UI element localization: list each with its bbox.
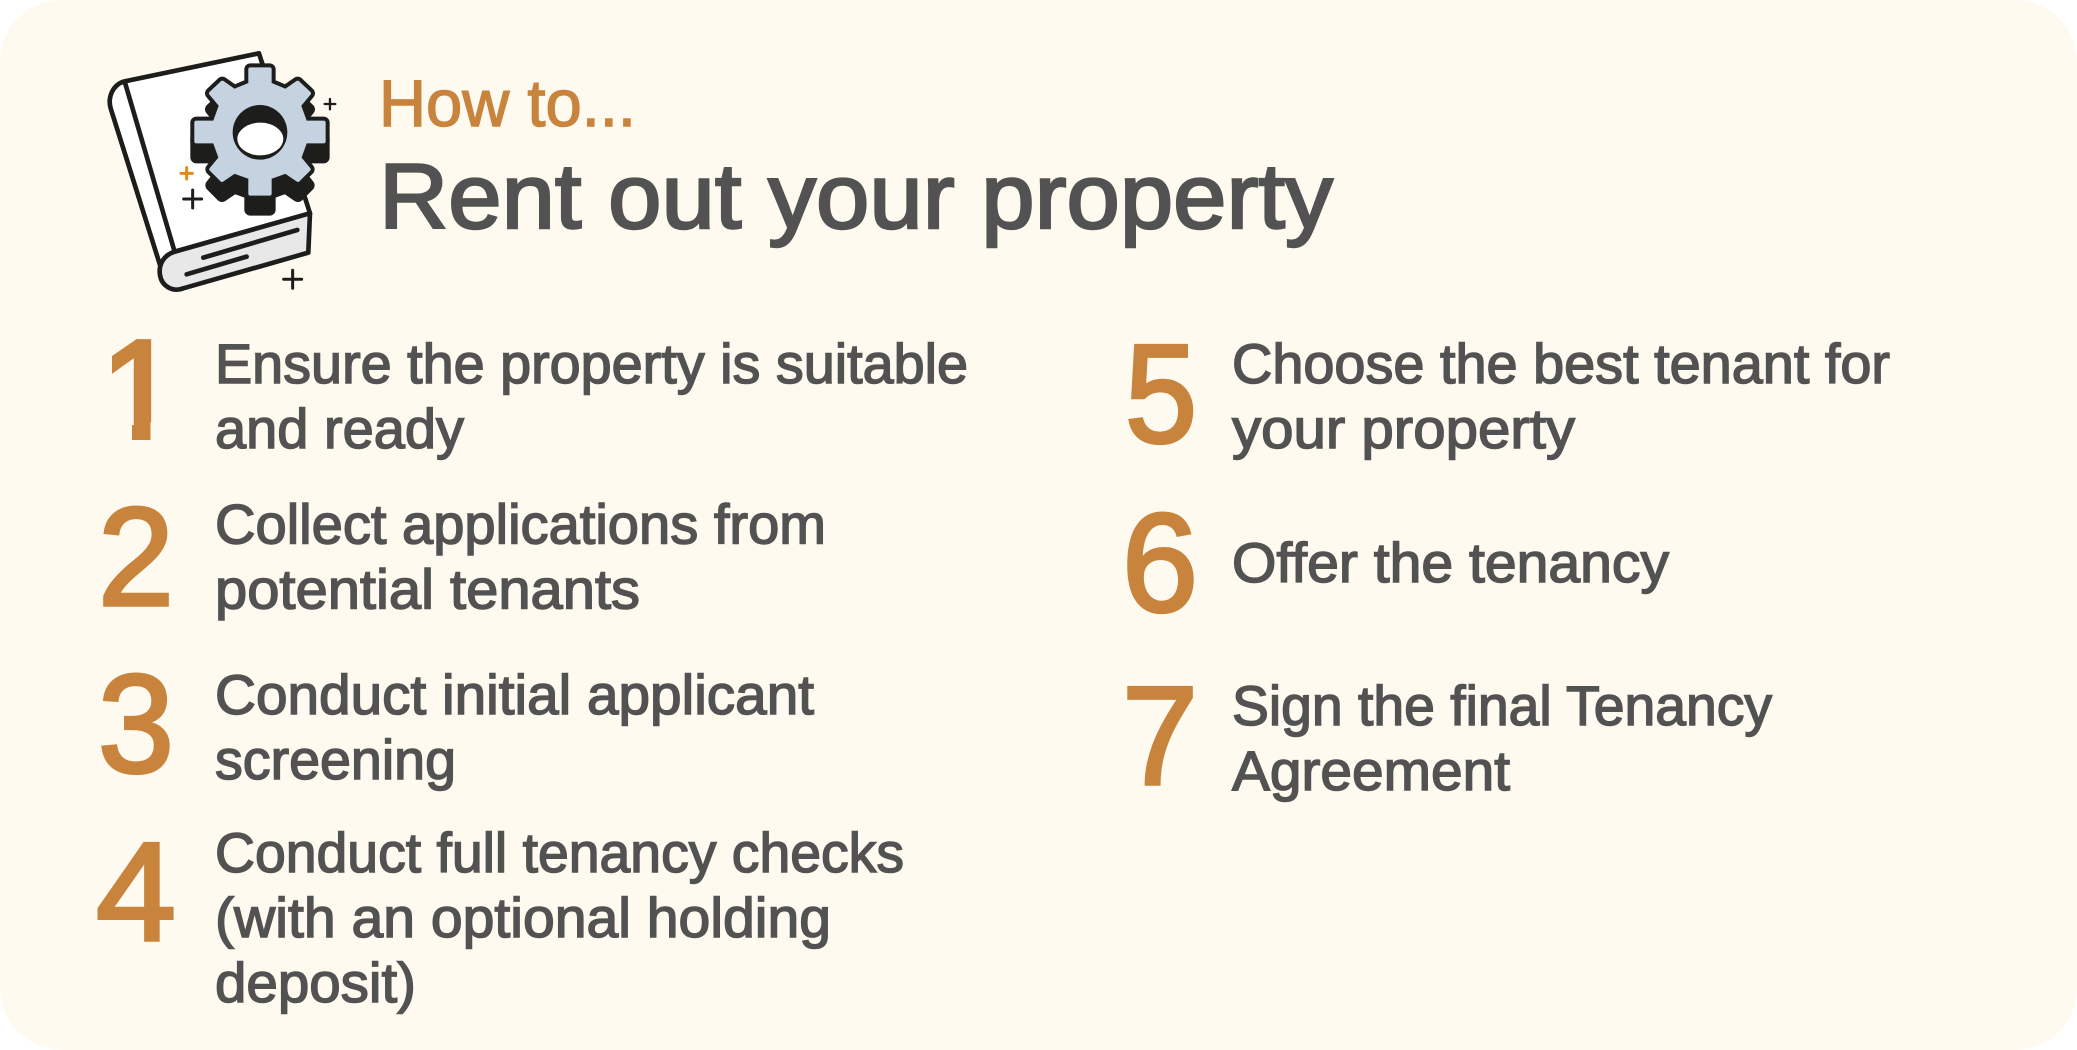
step 2: Collect applications from — [215, 492, 826, 556]
step 7: 7 — [1122, 657, 1198, 814]
step 3 — [98, 645, 814, 802]
step 7: Sign the final Tenancy — [1232, 674, 1772, 737]
icon: book with gear — [110, 53, 335, 290]
title: Rent out your property: Rent out your property — [379, 146, 1333, 248]
heading: How to...: How to... — [379, 66, 636, 140]
step 6: Offer the tenancy — [1232, 531, 1669, 594]
step 4: deposit) — [215, 951, 416, 1014]
step 5: 5 — [1125, 315, 1197, 472]
step 2: potential tenants — [215, 558, 640, 620]
step 2 — [98, 478, 826, 635]
step 5: Choose the best tenant for — [1232, 332, 1890, 395]
step 7: Agreement — [1232, 739, 1510, 802]
step 1: Ensure the property is suitable — [215, 332, 968, 395]
step 7 — [1122, 657, 1772, 814]
step 3: 3 — [98, 645, 174, 802]
step 3: Conduct initial applicant — [215, 663, 814, 726]
step 6 — [1122, 484, 1669, 641]
step 4: Conduct full tenancy checks — [215, 821, 904, 884]
step 3: screening — [215, 728, 456, 791]
step 6: 6 — [1122, 484, 1198, 641]
step 2: 2 — [98, 478, 174, 635]
step 4: 4 — [96, 813, 176, 970]
step 1: 1 — [101, 311, 179, 468]
step 1 — [112, 339, 966, 460]
step 5: your property — [1232, 397, 1575, 460]
step 5 — [1125, 315, 1890, 472]
step 1: and ready — [215, 397, 464, 460]
step 4: (with an optional holding — [215, 886, 831, 949]
step 4 — [96, 813, 904, 1014]
